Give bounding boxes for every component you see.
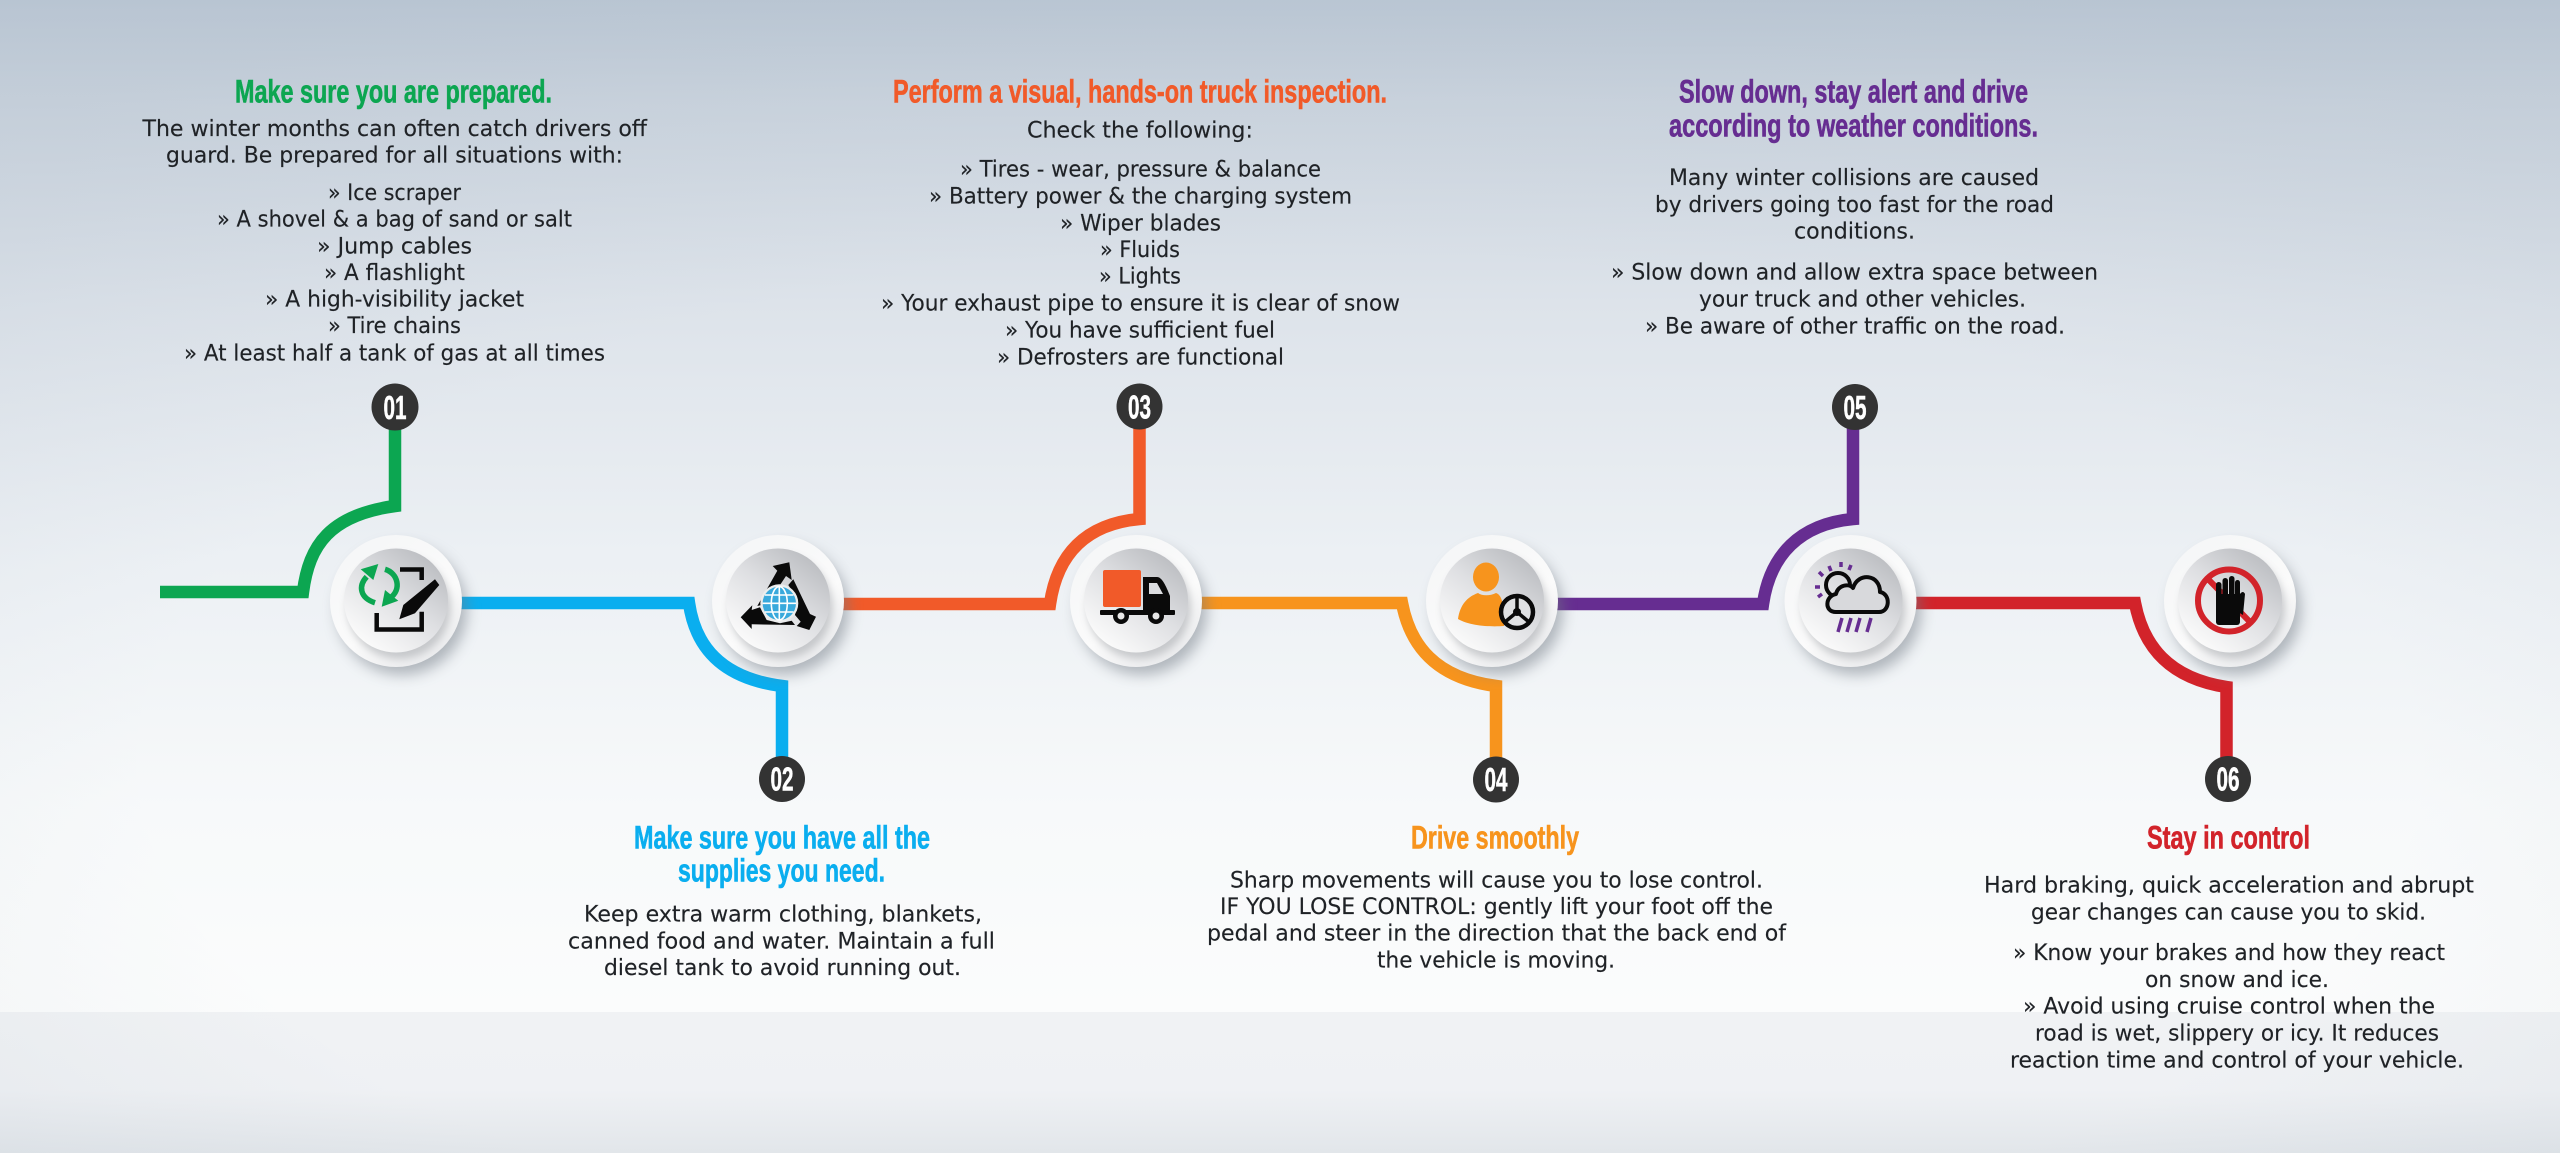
body text 4: the vehicle is moving.: [1377, 948, 1615, 973]
list 6: reaction time and control of your vehicle.: [2010, 1048, 2464, 1073]
panel: step 4 text: [1207, 819, 1787, 973]
icon: truck: [1100, 570, 1175, 624]
body text 2: Keep extra warm clothing, blankets,: [584, 903, 982, 928]
heading 2: Make sure you have all the: [634, 819, 930, 855]
intro text 1: [141, 117, 648, 169]
list 1: » Jump cables: [317, 234, 472, 259]
intro text 5: Many winter collisions are caused: [1669, 166, 2039, 191]
intro text 5: by drivers going too fast for the road: [1655, 193, 2054, 218]
number badge 04: [1473, 756, 1519, 802]
connector: step 2 blue: [455, 603, 782, 760]
list 3: » You have sufficient fuel: [1005, 319, 1275, 344]
icon disc 2: global supply triangle: [712, 535, 849, 675]
heading 5: according to weather conditions.: [1669, 108, 2038, 144]
number badge 01: [372, 384, 418, 430]
list 5: [1611, 260, 2098, 339]
list 1: » Tire chains: [328, 314, 461, 339]
body text 2: canned food and water. Maintain a full: [568, 929, 995, 954]
body text 2: [568, 903, 995, 981]
heading 5: [1669, 74, 2038, 144]
body text 2: diesel tank to avoid running out.: [604, 956, 961, 981]
number badge 01: 01: [384, 389, 406, 426]
list 3: » Wiper blades: [1060, 211, 1221, 236]
heading 6: Stay in control: [2147, 819, 2310, 855]
number badge 02: [759, 756, 805, 802]
body text 4: IF YOU LOSE CONTROL: gently lift your foot off the: [1220, 895, 1773, 920]
list 3: » Fluids: [1100, 238, 1180, 263]
heading 3: Perform a visual, hands-on truck inspection.: [893, 74, 1387, 110]
list 3: » Your exhaust pipe to ensure it is clear of snow: [881, 292, 1400, 317]
number badge 06: [2205, 756, 2251, 802]
number badge 06: 06: [2216, 760, 2240, 798]
icon disc 1: checklist with refresh arrows: [330, 535, 467, 675]
number badge 05: 05: [1844, 389, 1866, 426]
connector: step 6 red: [1910, 603, 2226, 760]
list 1: » A flashlight: [324, 261, 465, 286]
body text 4: pedal and steer in the direction that the back end of: [1207, 922, 1787, 947]
list 1: » A shovel & a bag of sand or salt: [217, 208, 572, 233]
heading 1: Make sure you are prepared.: [235, 74, 552, 110]
list 5: » Slow down and allow extra space between: [1611, 260, 2098, 285]
panel: step 3 text: [881, 74, 1400, 370]
number badge 03: 03: [1128, 388, 1151, 426]
list 5: » Be aware of other traffic on the road.: [1645, 314, 2065, 339]
heading 2: supplies you need.: [678, 853, 885, 889]
number badge 04: 04: [1484, 761, 1508, 798]
list 3: » Lights: [1099, 265, 1181, 290]
intro text 1: The winter months can often catch drivers off: [141, 117, 648, 142]
intro text 6: Hard braking, quick acceleration and abrupt: [1984, 874, 2474, 899]
heading 4: Drive smoothly: [1411, 819, 1579, 855]
list 1: » A high-visibility jacket: [265, 288, 524, 313]
list 1: » Ice scraper: [328, 181, 462, 206]
list 6: » Avoid using cruise control when the: [2023, 995, 2435, 1020]
intro text 5: conditions.: [1794, 220, 1915, 245]
list 6: road is wet, slippery or icy. It reduces: [2035, 1022, 2439, 1047]
list 5: your truck and other vehicles.: [1699, 287, 2026, 312]
heading 5: Slow down, stay alert and drive: [1679, 74, 2028, 110]
list 6: on snow and ice.: [2145, 968, 2329, 993]
panel: step 5 text: [1611, 74, 2098, 339]
icon disc 5: weather: [1784, 535, 1922, 675]
intro text 3: Check the following:: [1027, 119, 1253, 144]
list 6: [2010, 941, 2464, 1073]
list 3: » Tires - wear, pressure & balance: [960, 158, 1321, 183]
icon: driver: [1458, 562, 1533, 628]
list 3: » Battery power & the charging system: [929, 184, 1352, 209]
connector: step 1 green: [160, 425, 395, 592]
panel: step 6 text: [1984, 819, 2474, 1073]
number badge 05: [1832, 384, 1878, 430]
intro text 6: [1984, 874, 2474, 925]
list 1: [184, 181, 605, 367]
list 6: » Know your brakes and how they react: [2013, 941, 2445, 966]
icon: hand in prohibition sign: [2198, 570, 2260, 632]
panel: step 1 text: [141, 74, 648, 367]
heading 2: [634, 819, 930, 889]
number badge 03: [1116, 384, 1162, 430]
icon disc 4: driver and steering wheel: [1426, 535, 1563, 675]
intro text 5: [1655, 166, 2054, 245]
connector: step 5 purple: [1550, 425, 1853, 604]
connector: step 4 orange: [1195, 603, 1496, 760]
list 3: » Defrosters are functional: [997, 345, 1284, 370]
body text 4: Sharp movements will cause you to lose control.: [1230, 868, 1763, 893]
icon: three arrows and globe: [741, 562, 816, 630]
icon disc 3: truck: [1070, 535, 1207, 675]
icon disc 6: stop hand: [2164, 535, 2301, 675]
list 1: » At least half a tank of gas at all times: [184, 342, 605, 367]
list 3: [881, 158, 1400, 370]
panel: step 2 text: [568, 819, 995, 981]
icon: refresh arrows and pencil: [361, 564, 439, 630]
body text 4: [1207, 868, 1787, 973]
connector: step 3 orange-red: [835, 425, 1140, 604]
number badge 02: 02: [770, 760, 794, 798]
icon: sun, cloud and rain: [1815, 562, 1888, 632]
intro text 6: gear changes can cause you to skid.: [2031, 900, 2426, 925]
intro text 1: guard. Be prepared for all situations with:: [166, 144, 623, 169]
